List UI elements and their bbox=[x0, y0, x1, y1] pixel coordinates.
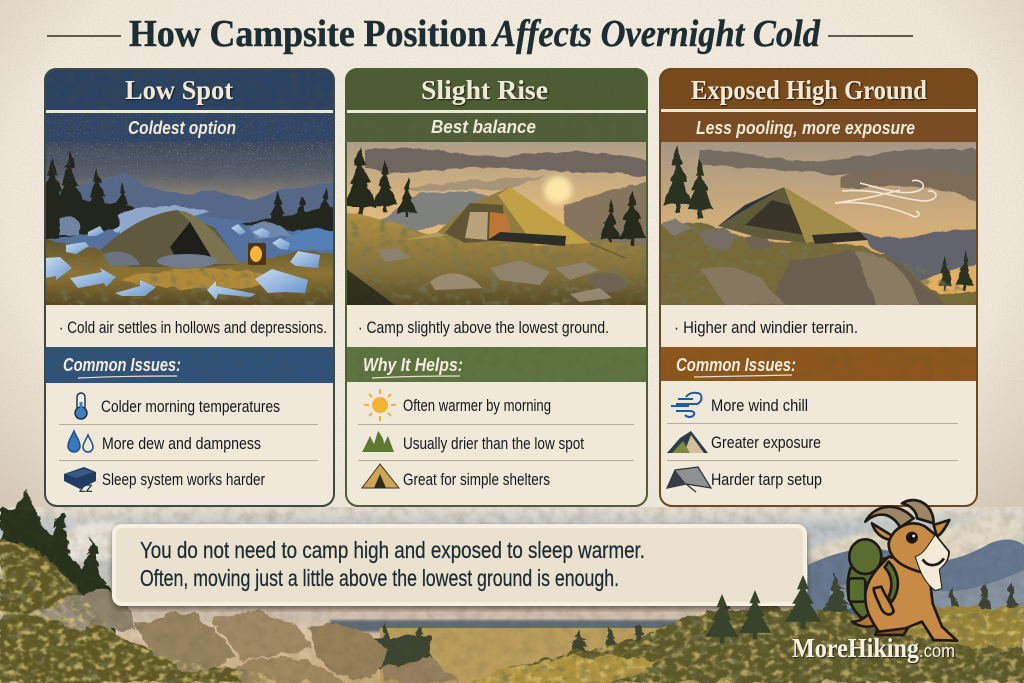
benefit list: slight rise bbox=[358, 389, 634, 489]
tent bbox=[437, 187, 564, 246]
subtitle: coldest option: Coldest option bbox=[128, 118, 236, 138]
goat body bbox=[865, 557, 957, 641]
section heading: common issues: Common Issues: bbox=[63, 355, 181, 375]
description: low spot: · Cold air settles in hollows and depressions. bbox=[59, 319, 327, 337]
left trees bbox=[0, 490, 120, 683]
panel: low spot bbox=[37, 68, 341, 507]
issue list: low spot bbox=[59, 393, 318, 495]
callout bbox=[114, 526, 805, 604]
smile bbox=[923, 558, 944, 565]
section heading: common issues: Common Issues: bbox=[676, 355, 796, 375]
paper grain bbox=[0, 0, 1024, 510]
logo: morehiking.com: .com bbox=[919, 641, 955, 661]
description: slight rise: · Camp slightly above the lowest ground. bbox=[358, 319, 609, 337]
mascot: hiking goat bbox=[848, 500, 957, 641]
panel: slight rise bbox=[339, 68, 654, 507]
cold air arrows bbox=[45, 224, 320, 300]
muzzle and beard bbox=[915, 535, 949, 591]
tail bbox=[852, 612, 875, 627]
scene: tent on a slight rise at sunset bbox=[347, 142, 646, 305]
icon: sleeping pad with zz: ZZ bbox=[79, 483, 93, 495]
rocks bbox=[378, 248, 410, 262]
horns bbox=[865, 500, 934, 527]
text: more dew and dampness: More dew and dampness bbox=[102, 435, 261, 453]
text: great for simple shelters: Great for simple shelters bbox=[403, 471, 550, 489]
tent bbox=[718, 187, 806, 243]
icon: tarp shelter bbox=[667, 467, 711, 492]
tent bbox=[100, 210, 240, 267]
scene: low spot with cold air bbox=[46, 142, 333, 305]
title: Affects Overnight Cold bbox=[491, 13, 821, 55]
bottom landscape bbox=[0, 490, 1024, 683]
icon: sleeping pad with zz bbox=[64, 467, 96, 495]
issue list: exposed high ground bbox=[667, 393, 958, 492]
panel title: slight rise: Slight Rise bbox=[421, 75, 548, 105]
backpack bbox=[848, 539, 899, 618]
head bbox=[889, 523, 949, 573]
icon: wind bbox=[671, 393, 702, 417]
text: sleep system works harder: Sleep system works harder bbox=[102, 471, 265, 489]
panel title: exposed high ground: Exposed High Ground bbox=[691, 75, 927, 105]
subtitle: less pooling, more exposure: Less pooling, more exposure bbox=[696, 118, 915, 138]
section heading: why it helps: Why It Helps: bbox=[363, 355, 463, 375]
icon: water drops bbox=[68, 431, 93, 452]
arm bbox=[874, 587, 894, 614]
title: How Campsite Position bbox=[129, 13, 487, 55]
icon: grass bbox=[362, 431, 394, 452]
text: often warmer by morning: Often warmer by morning bbox=[403, 397, 551, 415]
icon: a-frame tent bbox=[362, 464, 399, 488]
section band: common issues bbox=[44, 347, 335, 383]
callout text line 2: Often, moving just a little above the lowest ground is enough. bbox=[140, 565, 619, 591]
text: more wind chill: More wind chill bbox=[711, 397, 808, 415]
eye bbox=[907, 533, 917, 542]
text: usually drier than the low spot: Usually drier than the low spot bbox=[403, 435, 584, 453]
section band: why it helps bbox=[345, 347, 648, 382]
shrub slopes bbox=[0, 540, 290, 683]
distant tree line bbox=[355, 573, 1024, 672]
subtitle: best balance: Best balance bbox=[431, 117, 536, 137]
rocks bbox=[30, 603, 110, 630]
text: harder tarp setup: Harder tarp setup bbox=[711, 471, 822, 489]
text: colder morning temperatures: Colder morning temperatures bbox=[101, 398, 280, 416]
title bbox=[47, 13, 913, 55]
panel header: slight rise bbox=[345, 68, 648, 110]
wind lines bbox=[835, 180, 936, 217]
logo: morehiking.com: MoreHiking bbox=[792, 633, 919, 663]
icon: thermometer bbox=[75, 393, 87, 419]
callout text line 1: You do not need to camp high and exposed to sleep warmer. bbox=[140, 537, 645, 563]
ears bbox=[872, 523, 894, 540]
description: exposed high ground: · Higher and windier terrain. bbox=[674, 319, 858, 337]
panel header: low spot bbox=[44, 68, 335, 110]
icon: sun bbox=[364, 389, 396, 421]
back leg bbox=[875, 623, 909, 635]
scene: tent on exposed rocks with wind bbox=[661, 142, 976, 305]
panel: exposed high ground bbox=[653, 68, 984, 507]
section band: common issues bbox=[659, 347, 978, 381]
icon: mountain bbox=[667, 431, 708, 453]
text: greater exposure: Greater exposure bbox=[711, 434, 821, 452]
trees overlapping callout bbox=[706, 575, 821, 644]
panel header: exposed high ground bbox=[659, 68, 978, 109]
panel title: low spot: Low Spot bbox=[125, 75, 233, 105]
pack strap bbox=[885, 562, 898, 602]
